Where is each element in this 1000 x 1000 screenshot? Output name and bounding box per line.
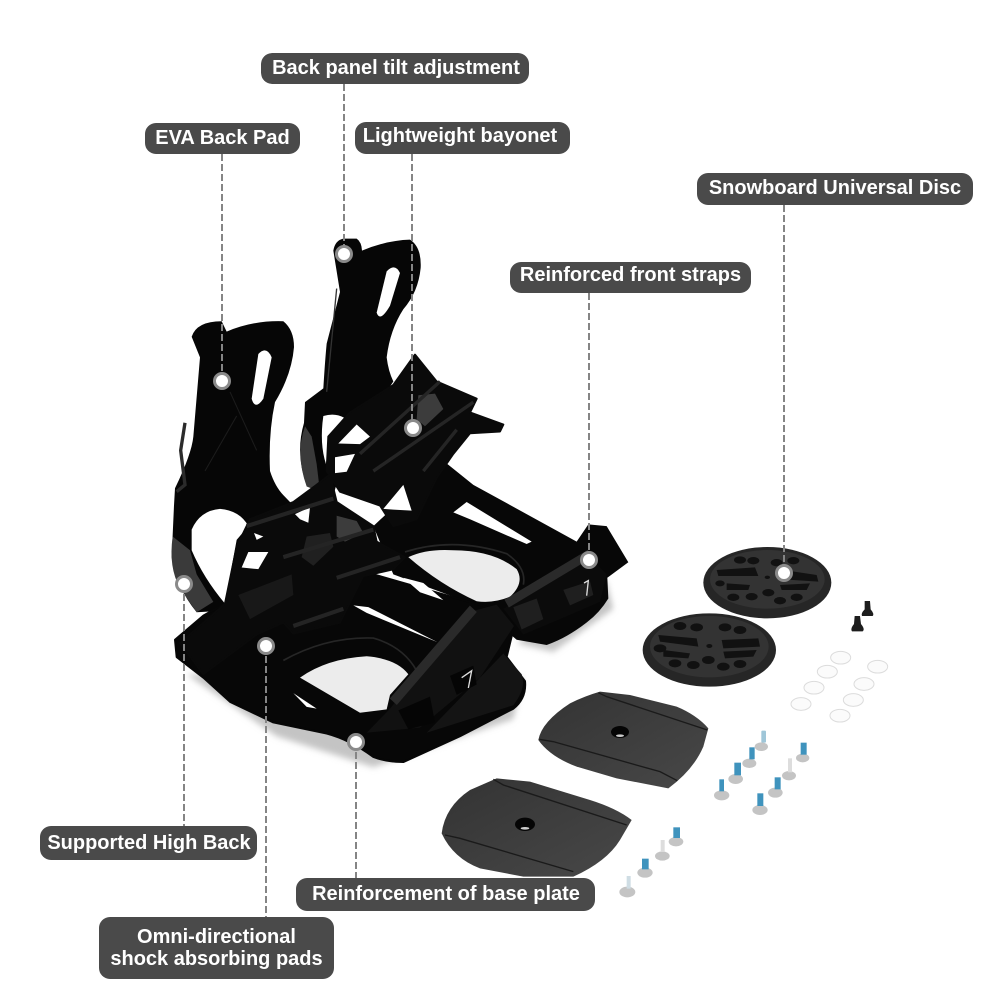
- silver screw heads: [619, 742, 809, 897]
- binding disc upper: [703, 547, 831, 618]
- binding disc lower: [643, 613, 776, 687]
- floor shadow: [187, 581, 613, 767]
- rear toe strap: [503, 554, 607, 635]
- label: omni-directional shock absorbing pads: Omni-directional: [137, 926, 296, 948]
- mounting plate upper: [538, 692, 708, 788]
- marker dots: [176, 246, 792, 750]
- label: supported high back: Supported High Back: [47, 832, 251, 854]
- rear ankle strap: [327, 355, 503, 526]
- leader lines: [184, 84, 784, 917]
- front base plate: [175, 574, 525, 762]
- label: omni-directional shock absorbing pads: shock absorbing pads: [110, 948, 323, 970]
- label: EVA back pad: EVA Back Pad: [155, 127, 290, 149]
- hardware parts: [442, 547, 888, 897]
- label: reinforcement of base plate: Reinforcement of base plate: [312, 883, 580, 905]
- label: lightweight bayonet: [355, 122, 570, 154]
- label: reinforced front straps: [510, 262, 751, 293]
- label: back panel tilt adjustment: [261, 53, 531, 84]
- label: back panel tilt adjustment: Back panel tilt adjustment: [272, 57, 520, 79]
- label: lightweight bayonet: Lightweight bayonet: [363, 125, 557, 147]
- label: reinforced front straps: Reinforced front straps: [520, 264, 741, 286]
- label: reinforcement of base plate: [296, 878, 595, 911]
- mounting plate lower: [442, 778, 632, 877]
- label: EVA back pad: [145, 123, 300, 154]
- label: snowboard universal disc: [697, 173, 973, 205]
- white washers: [791, 651, 888, 722]
- front ankle strap: [180, 474, 405, 674]
- label: omni-directional shock absorbing pads: [99, 917, 334, 979]
- front toe strap: [367, 605, 514, 733]
- binding pair: [171, 239, 628, 767]
- rear base plate: [373, 461, 628, 645]
- front high back: [171, 321, 300, 612]
- black screws: [851, 601, 873, 631]
- rear high back: [300, 239, 421, 495]
- blue screw threads: [627, 731, 807, 889]
- label: supported high back: [40, 826, 257, 860]
- label: snowboard universal disc: Snowboard Universal Disc: [709, 177, 961, 199]
